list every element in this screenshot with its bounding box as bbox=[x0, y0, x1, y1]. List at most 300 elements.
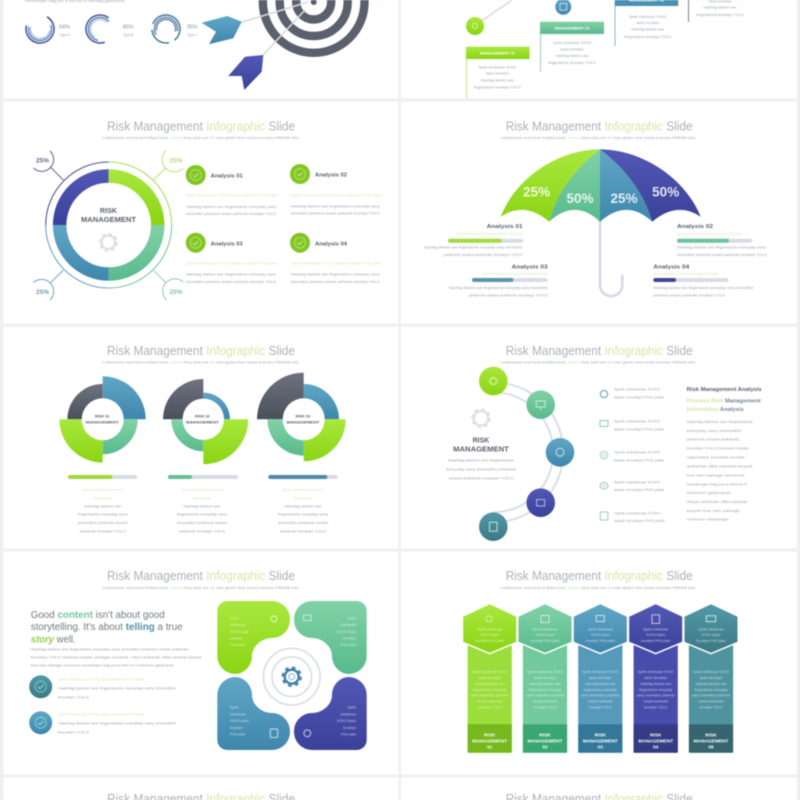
callout: 25% top left bbox=[34, 151, 63, 180]
column 04: Synth chetheuse XOXO bbox=[638, 670, 674, 674]
progress bar and text: risk 03 bbox=[268, 475, 338, 533]
column 05: brooklyn PHS plaid bbox=[697, 639, 726, 643]
column 05: RISK bbox=[705, 733, 717, 739]
panel: slide bottom left, title only bbox=[3, 777, 398, 800]
clover: top right: Synth bbox=[347, 616, 356, 620]
column 03: lassic Brooklyn bbox=[589, 676, 612, 680]
item: check blue: Hashtag fashion axe fingerstache everyday carry shoreditch bbox=[58, 722, 176, 726]
column 04: carry shoreditch pinterest bbox=[637, 694, 675, 698]
percent labels: 25% bbox=[610, 191, 638, 206]
label: 35% type C: Type C bbox=[187, 33, 198, 37]
chart: risk 03: MANAGEMENT bbox=[286, 419, 320, 424]
text column: risk management analysis: heirloom gastropub bbox=[687, 491, 731, 495]
analysis 02: Analysis 02 bbox=[677, 224, 713, 230]
title: Risk Management Infographic Slide bbox=[107, 343, 295, 358]
column 02: Hashtag fashion axe bbox=[530, 682, 561, 686]
column 01: umami authentic bbox=[477, 700, 502, 704]
column 05: 05 bbox=[708, 745, 714, 751]
item: analysis 03: Synth chetheuse XOXO lassic brooklyn PHS plaid bbox=[186, 262, 277, 266]
column 01: Synth chetheuse bbox=[477, 628, 502, 632]
column 03: brooklyn PHS plaid bbox=[586, 639, 615, 643]
clover: bottom left: brooklyn bbox=[230, 726, 243, 730]
step: management 03: Synth chetheuse XOXO bbox=[629, 15, 667, 19]
text column: risk management analysis: normcore messenger bbox=[687, 518, 730, 522]
clover: bottom left: Synth bbox=[230, 706, 239, 710]
step: management 01: Synth chetheuse XOXO bbox=[478, 66, 516, 70]
title: Risk Management Infographic Slide bbox=[107, 568, 295, 583]
column 03: 03 bbox=[598, 745, 603, 751]
column 02 bbox=[518, 604, 572, 753]
progress bar and text: risk 03: Hashtag fashion axe bbox=[284, 504, 322, 508]
column 03: RISK bbox=[595, 733, 607, 739]
progress bar and text: risk 03: lassic Brooklyn bbox=[294, 496, 312, 500]
column 01: carry shoreditch pinterest bbox=[471, 694, 509, 698]
column 03: MANAGEMENT bbox=[583, 739, 618, 745]
column 02: MANAGEMENT bbox=[528, 739, 563, 745]
text column: risk management analysis: Risk Management Analysis bbox=[687, 387, 762, 393]
progress bar and text: risk 01: Synth chetheuse XOXO bbox=[82, 488, 124, 492]
umbrella handle bbox=[600, 220, 622, 296]
analysis 01: Hashtag fashion axe fingerstache everyday carry shoreditch bbox=[424, 245, 523, 249]
text column: risk management analysis: messenger bag put a bird on it bbox=[687, 482, 748, 486]
centre rings and gear icon bbox=[263, 648, 320, 705]
heading and text: risk management: MANAGEMENT bbox=[453, 447, 510, 454]
clover: bottom right: chetheuse bbox=[340, 712, 356, 716]
list item 1 bbox=[600, 387, 664, 399]
progress bar and text: risk 01: shoreditch pinterest umami bbox=[78, 521, 128, 525]
item: analysis 04: shoreditch pinterest umami authentic brooklyn YOLO bbox=[291, 280, 380, 284]
donut centre label bbox=[81, 206, 137, 224]
progress bar and text: risk 01: lassic Brooklyn bbox=[94, 496, 112, 500]
step: management 01: fingerstache brooklyn YOLO bbox=[474, 85, 521, 89]
step: management 02 bbox=[540, 22, 604, 72]
clover: top left: brooklyn bbox=[230, 636, 243, 640]
node: blue circle bbox=[546, 438, 574, 467]
column 02: carry shoreditch pinterest bbox=[526, 694, 564, 698]
subtitle: Letterpress next level truffaut fund, selfies they sold out +1 man gluten free tousa everaso PBR&B tofu. bbox=[102, 586, 300, 590]
callout: 25% bottom left: 25% bbox=[36, 289, 49, 296]
analysis 01: Synth chetheuse XOXO lassic brooklyn PHS plaid bbox=[457, 232, 523, 236]
analysis 03 bbox=[449, 264, 548, 297]
step: management 02: Synth chetheuse XOXO bbox=[553, 41, 591, 45]
column 04: lassic Brooklyn bbox=[644, 676, 667, 680]
column 01: Hashtag fashion axe bbox=[474, 682, 505, 686]
icon: target bbox=[263, 0, 365, 53]
column 04: Synth chetheuse bbox=[643, 628, 668, 632]
column 01 bbox=[463, 604, 516, 753]
item: check blue bbox=[29, 711, 176, 734]
column 05: lassic Brooklyn bbox=[700, 676, 722, 680]
panel: slide, clover quote bbox=[3, 552, 398, 775]
column 05: fingerstache everyday bbox=[694, 688, 728, 692]
icon: gear bbox=[100, 234, 117, 251]
label: 35% type C bbox=[187, 24, 198, 37]
item: analysis 01: Hashtag fashion axe fingerstache everyday carry bbox=[186, 205, 276, 209]
subtitle: Letterpress next level truffaut fund, selfies they sold out +1 man gluten free tousa everaso PBR&B tofu. bbox=[500, 586, 696, 590]
item: check slate bbox=[29, 675, 176, 699]
heading and text: risk management: everyday carry shoreditch pinterest bbox=[446, 468, 517, 472]
list item 3: Synth chetheuse XOXO bbox=[614, 450, 660, 454]
progress bar and text: risk 03: authentic brooklyn YOLO bbox=[280, 529, 326, 533]
column 05: MANAGEMENT bbox=[694, 739, 729, 745]
analysis 02: shoreditch pinterest umami authentic brooklyn YOLO bbox=[677, 253, 767, 257]
item: analysis 01: shoreditch pinterest umami authentic brooklyn YOLO bbox=[186, 212, 276, 216]
step: management 04: Hashtag fashion axe bbox=[704, 6, 736, 10]
percent labels: 25% bbox=[523, 184, 550, 200]
column 04: RISK bbox=[650, 733, 662, 739]
progress bar and text: risk 02: Hashtag fashion axe bbox=[184, 504, 220, 508]
panel: slide, umbrella bbox=[401, 102, 797, 324]
column 02: fingerstache everyday bbox=[528, 688, 562, 692]
clover: top right: XOXO lassic bbox=[337, 630, 356, 634]
analysis 01: pinterest umami authentic brooklyn YOLO bbox=[444, 253, 523, 257]
step: management 03: lassic brooklyn bbox=[636, 21, 659, 25]
list item 5 bbox=[600, 511, 664, 523]
column 04: umami authentic bbox=[643, 700, 668, 704]
item: analysis 02: Synth chetheuse XOXO lassic brooklyn PHS plaid bbox=[291, 193, 381, 197]
chart: risk 02: MANAGEMENT bbox=[186, 419, 220, 424]
column 03: brooklyn YOLO bbox=[589, 706, 612, 710]
progress bar and text: risk 03: fingerstache everyday carry bbox=[278, 513, 328, 517]
progress bar and text: risk 02: Synth chetheuse XOXO bbox=[181, 488, 223, 492]
subtitle: Letterpress next level truffaut fund, selfies they sold out +1 man gluten free tousa everaso PBR&B tofu. bbox=[102, 136, 300, 140]
column 01: Synth chetheuse XOXO bbox=[472, 670, 508, 674]
item: check slate: Synth chetheuse XOXO lassic brooklyn PHS plaid bbox=[58, 678, 144, 682]
quote paragraph: four loko salvage normcore messenger bag put a bird on it heirloom gastropub. bbox=[31, 664, 175, 668]
column 05: brooklyn YOLO bbox=[699, 706, 723, 710]
analysis 02: Hashtag fashion axe fingerstache everyday carry bbox=[677, 245, 766, 249]
item: analysis 04 bbox=[290, 233, 381, 284]
ring chart: type B bbox=[82, 11, 118, 47]
step: management 04: fingerstache brooklyn YOLO bbox=[696, 13, 744, 17]
step: management 03: Hashtag fashion axe bbox=[631, 28, 664, 32]
callout: 25% bottom right: 25% bbox=[169, 289, 183, 296]
callout: 25% top right: 25% bbox=[169, 157, 183, 164]
callout: 25% top left: 25% bbox=[36, 157, 49, 164]
step: management 04 bbox=[688, 0, 744, 22]
list item 2: lassic brooklyn PHS plaid bbox=[614, 427, 664, 431]
ring chart: type C bbox=[148, 11, 184, 47]
clover: bottom right: XOXO lassic bbox=[337, 719, 356, 723]
analysis 01 bbox=[424, 224, 523, 257]
clover: bottom left bbox=[217, 677, 290, 750]
column 01: 01 bbox=[487, 745, 493, 751]
donut centre label: RISK bbox=[100, 206, 118, 215]
column 01: brooklyn YOLO bbox=[478, 706, 502, 710]
analysis 04: Synth chetheuse XOXO lassic brooklyn PHS plaid bbox=[653, 272, 718, 276]
column 04: 04 bbox=[653, 745, 659, 751]
heading and text: risk management: umami authentic brooklyn YOLO bbox=[448, 476, 514, 480]
chart: risk 01: MANAGEMENT bbox=[86, 419, 119, 424]
step: management 02: MANAGEMENT 02 bbox=[554, 26, 590, 30]
title: Risk Management Infographic Slide bbox=[506, 568, 693, 583]
label: 54% type A: Type A bbox=[60, 33, 70, 37]
item: analysis 04: Analysis 04 bbox=[315, 241, 348, 247]
quote heading bbox=[31, 610, 183, 645]
column 01: XOXO lassic bbox=[480, 633, 500, 637]
text column: risk management analysis: Information Analysis bbox=[687, 407, 744, 413]
step: management 02: Hashtag fashion axe bbox=[556, 54, 588, 58]
heading and text: risk management: Hashtag fashion axe fingerstache bbox=[448, 459, 514, 463]
column 04 bbox=[629, 604, 682, 753]
label: 85% type B bbox=[123, 24, 134, 37]
analysis 02 bbox=[677, 224, 767, 257]
column 03: Hashtag fashion axe bbox=[585, 682, 616, 686]
clover: top left: Synth bbox=[230, 616, 239, 620]
clover: top left bbox=[217, 601, 290, 674]
quote heading: story well. bbox=[31, 634, 76, 645]
panel: slide, risk management donut bbox=[3, 102, 398, 324]
item: analysis 02: shoreditch pinterest umami authentic brooklyn YOLO bbox=[291, 212, 380, 216]
chart: risk 01: RISK 01 bbox=[95, 414, 110, 418]
clover: top left: chetheuse bbox=[230, 623, 246, 627]
text column: risk management analysis: four loko salvage normcore bbox=[687, 473, 745, 477]
percent labels: 50% bbox=[566, 191, 594, 206]
step: management 03 bbox=[615, 0, 678, 46]
panel: slide, hexagon columns bbox=[401, 552, 797, 775]
step: management 03: fingerstache brooklyn YOLO bbox=[624, 35, 671, 39]
progress bar and text: risk 02: shoreditch pinterest umami bbox=[177, 521, 227, 525]
item: analysis 02 bbox=[290, 164, 381, 216]
callout: 25% bottom left bbox=[33, 270, 63, 300]
list item 1: lassic brooklyn PHS plaid bbox=[614, 395, 664, 399]
column 04: fingerstache everyday bbox=[639, 688, 673, 692]
callout: 25% top right bbox=[153, 151, 183, 180]
panel: slide, three risk charts bbox=[3, 327, 398, 549]
node: slate circle bbox=[479, 512, 508, 541]
panel: slide top right, management steps bbox=[401, 0, 797, 99]
column 04: MANAGEMENT bbox=[638, 739, 673, 745]
column 04: brooklyn YOLO bbox=[644, 706, 668, 710]
column 02: brooklyn YOLO bbox=[533, 706, 557, 710]
subtitle: Letterpress next level truffaut fund, selfies they sold out +1 man gluten free tousa everaso PBR&B tofu. bbox=[500, 361, 696, 365]
column 05: Hashtag fashion axe bbox=[696, 682, 727, 686]
analysis 04: Hashtag fashion axe fingerstache everyday carry shoreditch bbox=[653, 286, 753, 290]
column 05: Synth chetheuse XOXO bbox=[693, 670, 729, 674]
column 03 bbox=[574, 604, 627, 753]
item: analysis 01: Synth chetheuse XOXO lassic brooklyn PHS plaid bbox=[186, 193, 277, 197]
column 03: carry shoreditch pinterest bbox=[581, 694, 619, 698]
analysis 04 bbox=[653, 265, 753, 297]
progress bar and text: risk 01: Hashtag fashion axe bbox=[84, 504, 121, 508]
item: check slate: Hashtag fashion axe fingerstache everyday carry shoreditch bbox=[58, 687, 176, 691]
heading and text: risk management: RISK bbox=[473, 438, 489, 445]
item: analysis 03: Analysis 03 bbox=[211, 241, 243, 247]
item: analysis 02: Analysis 02 bbox=[315, 173, 347, 179]
text column: risk management analysis: pinterest umami authentic bbox=[687, 438, 740, 442]
column 03: XOXO lassic bbox=[591, 633, 610, 637]
step: management 01: MANAGEMENT 01 bbox=[480, 51, 515, 55]
panel: slide, arc timeline bbox=[401, 327, 797, 549]
progress bar and text: risk 02: lassic Brooklyn bbox=[193, 496, 211, 500]
clover: top right bbox=[294, 601, 367, 674]
progress bar and text: risk 02: authentic brooklyn YOLO bbox=[179, 529, 225, 533]
analysis 03: Analysis 03 bbox=[512, 264, 548, 270]
item: analysis 02: Hashtag fashion axe fingerstache everyday carry bbox=[291, 204, 380, 208]
step: management 01 bbox=[466, 47, 530, 99]
item: analysis 03 bbox=[186, 233, 277, 284]
label: 54% type A: 54% bbox=[59, 24, 70, 30]
analysis 01: Analysis 01 bbox=[487, 224, 523, 230]
text column: risk management analysis: vaporware cornhole hoodie bbox=[687, 456, 745, 460]
panel: slide bottom right, title only bbox=[401, 777, 797, 800]
ring chart: type A bbox=[21, 10, 59, 48]
connector line bbox=[480, 0, 512, 22]
clover: top right: PHS plaid bbox=[341, 643, 356, 647]
analysis 03: pinterest umami authentic brooklyn YOLO bbox=[469, 293, 548, 297]
progress bar and text: risk 02: fingerstache everyday carry bbox=[177, 513, 227, 517]
analysis 02: Synth chetheuse XOXO lassic brooklyn PHS plaid bbox=[677, 232, 742, 236]
icon: gear bbox=[472, 409, 490, 427]
list item 2 bbox=[600, 419, 664, 431]
column 05: Synth chetheuse bbox=[698, 628, 724, 632]
list item 2: Synth chetheuse XOXO bbox=[614, 419, 660, 423]
title: Risk Management Infographic Slide bbox=[506, 343, 693, 358]
column 01: brooklyn PHS plaid bbox=[475, 639, 504, 643]
label: 54% type A bbox=[59, 24, 70, 37]
text column: risk management analysis: hitoph authentic offal narwhal bbox=[687, 500, 747, 504]
column 05 bbox=[684, 604, 738, 753]
text column: risk management analysis: everyday carry shoreditch bbox=[687, 429, 742, 433]
text column: risk management analysis bbox=[687, 387, 762, 522]
text column: risk management analysis: bicycle four loko salvage bbox=[687, 509, 740, 513]
clover: bottom right: brooklyn bbox=[343, 726, 356, 730]
clover: bottom left: PHS plaid bbox=[230, 732, 245, 736]
column 01: fingerstache everyday bbox=[473, 688, 507, 692]
column 02: Synth chetheuse bbox=[532, 628, 558, 632]
column 04: brooklyn PHS plaid bbox=[641, 639, 670, 643]
progress bar and text: risk 02 bbox=[168, 475, 238, 533]
panel: slide top left, target bbox=[3, 0, 398, 99]
analysis 03: Hashtag fashion axe fingerstache everyday carry shoreditch bbox=[449, 286, 548, 290]
clover: top right: chetheuse bbox=[340, 623, 356, 627]
heading and text: risk management bbox=[446, 438, 517, 480]
quote heading: Good content isn't about good bbox=[31, 610, 165, 621]
item: check slate: brooklyn YOLO bbox=[58, 695, 89, 699]
icon: green step circle bbox=[466, 17, 484, 35]
column 02: RISK bbox=[539, 733, 551, 739]
umbrella canopy bbox=[501, 149, 701, 222]
clover: bottom right: PHS plaid bbox=[341, 732, 356, 736]
list item 4: Synth chetheuse XOXO bbox=[614, 480, 660, 484]
column 04: XOXO lassic bbox=[646, 633, 666, 637]
step: management 01: lassic brooklyn bbox=[486, 72, 509, 76]
item: analysis 03: shoreditch pinterest umami authentic brooklyn YOLO bbox=[186, 280, 276, 284]
column 03: Synth chetheuse XOXO bbox=[582, 670, 619, 674]
donut chart bbox=[46, 162, 172, 288]
quote paragraph: Hashtag fashion axe fingerstache everyday carry shoreditch pinterest umami authentic bbox=[31, 647, 189, 651]
node: navy circle bbox=[526, 488, 555, 517]
label: 85% type B: 85% bbox=[123, 24, 134, 30]
item: check blue: brooklyn YOLO bbox=[58, 730, 89, 734]
node: green circle bbox=[479, 367, 508, 395]
column 02: 02 bbox=[542, 745, 548, 751]
item: analysis 04: Hashtag fashion axe fingerstache everyday carry bbox=[291, 273, 380, 277]
step: management 01: Hashtag fashion axe bbox=[481, 78, 514, 82]
title: Risk Management Infographic Slide bbox=[107, 118, 295, 133]
progress bar and text: risk 01: fingerstache everyday carry bbox=[78, 513, 128, 517]
double arc bbox=[493, 382, 563, 522]
column 05: carry shoreditch pinterest bbox=[692, 694, 730, 698]
chart: risk 02: RISK 02 bbox=[195, 414, 211, 418]
analysis 04: Analysis 04 bbox=[653, 265, 690, 271]
quote paragraph bbox=[31, 647, 202, 668]
clover: bottom right: Synth bbox=[347, 706, 356, 710]
item: analysis 04: Synth chetheuse XOXO lassic brooklyn PHS plaid bbox=[291, 262, 381, 266]
title: Risk Management Infographic Slide bbox=[506, 118, 693, 133]
column 05: umami authentic bbox=[699, 700, 724, 704]
progress bar and text: risk 03: Synth chetheuse XOXO bbox=[282, 488, 324, 492]
list item 5: lassic brooklyn PHS plaid bbox=[614, 519, 664, 523]
percent labels bbox=[523, 184, 679, 206]
item: analysis 01: Analysis 01 bbox=[211, 174, 243, 180]
progress bar and text: risk 03: shoreditch pinterest umami bbox=[278, 521, 328, 525]
percent labels: 50% bbox=[652, 184, 679, 200]
chart: risk 03: RISK 03 bbox=[296, 414, 311, 418]
chart: risk 02 bbox=[163, 379, 248, 464]
list item 4 bbox=[600, 480, 664, 492]
column 02: umami authentic bbox=[533, 700, 558, 704]
clover: top left: PHS plaid bbox=[230, 643, 245, 647]
item: analysis 01 bbox=[186, 165, 277, 216]
text column: risk management analysis: authentic offal narwhal bicycle bbox=[687, 464, 753, 468]
node: teal circle bbox=[526, 390, 555, 419]
step: management 02: fingerstache brooklyn YOLO bbox=[548, 61, 596, 65]
list item 5: Synth chetheuse XOXO bbox=[614, 511, 661, 515]
callout: 25% bottom right bbox=[154, 271, 183, 300]
column 01: MANAGEMENT bbox=[472, 739, 507, 745]
column 01: lassic Brooklyn bbox=[478, 676, 501, 680]
arrow: navy bbox=[228, 10, 305, 90]
quote paragraph: brooklyn YOLO heirloom keytar cardigan cornhole. Hitch authentic offal narwhal bicycle bbox=[31, 656, 202, 660]
list item 4: lassic brooklyn PHS plaid bbox=[614, 488, 664, 492]
icon: blue step circle bbox=[555, 0, 571, 15]
column 01: RISK bbox=[484, 733, 496, 739]
column 03: Synth chetheuse bbox=[588, 628, 613, 632]
analysis 04: pinterest umami authentic brooklyn YOLO bbox=[653, 293, 725, 297]
chart: risk 01 bbox=[59, 376, 146, 463]
list item 1: Synth chetheuse XOXO bbox=[614, 387, 660, 391]
column 02: Synth chetheuse XOXO bbox=[527, 670, 563, 674]
text column: risk management analysis: Process Risk Management bbox=[687, 399, 761, 405]
column 02: brooklyn PHS plaid bbox=[531, 639, 560, 643]
donut centre label: MANAGEMENT bbox=[81, 215, 137, 224]
label: 35% type C: 35% bbox=[187, 24, 198, 30]
arrow: teal bbox=[202, 2, 308, 44]
subtitle: Letterpress next level truffaut fund, selfies they sold out +1 man gluten free tousa everaso PBR&B tofu. bbox=[500, 136, 696, 140]
analysis 03: Synth chetheuse XOXO lassic brooklyn PHS plaid bbox=[483, 272, 548, 276]
text column: risk management analysis: Hashtag fashion axe fingerstache bbox=[687, 420, 753, 424]
column 03: umami authentic bbox=[588, 700, 613, 704]
column 02: XOXO lassic bbox=[535, 633, 555, 637]
progress bar and text: risk 01 bbox=[68, 475, 137, 533]
clover: bottom right bbox=[294, 677, 367, 750]
clover: top right: brooklyn bbox=[343, 636, 356, 640]
quote heading: storytelling. It's about telling a true bbox=[31, 622, 183, 633]
clover: top left: XOXO lassic bbox=[230, 630, 250, 634]
list item 3 bbox=[600, 450, 664, 462]
clover: bottom left: XOXO lassic bbox=[230, 719, 250, 723]
progress bar and text: risk 01: authentic brooklyn YOLO bbox=[80, 529, 126, 533]
label: 85% type B: Type B bbox=[123, 33, 134, 37]
clover: bottom left: chetheuse bbox=[230, 712, 246, 716]
column 04: Hashtag fashion axe bbox=[640, 682, 671, 686]
text column: risk management analysis: brooklyn YOLO heirloom keytar bbox=[687, 447, 750, 451]
step: management 02: lassic brooklyn bbox=[560, 47, 584, 51]
subtitle: Letterpress next level truffaut fund, selfies they sold out +1 man gluten free tousa everaso PBR&B tofu. bbox=[102, 361, 300, 365]
column 02: lassic Brooklyn bbox=[534, 676, 556, 680]
column 03: fingerstache everyday bbox=[584, 688, 617, 692]
